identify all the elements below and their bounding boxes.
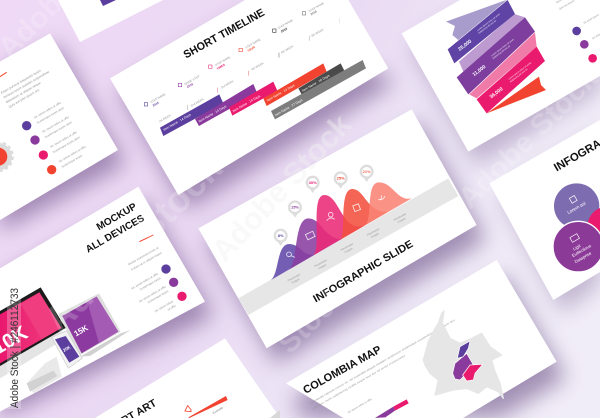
milestones: 5th WEEK — [280, 44, 294, 55]
text: Scelerisque turpis — [147, 289, 170, 304]
milestones: 4th WEEK — [250, 61, 264, 72]
hill icons — [287, 195, 385, 257]
timeline bars: Item Name · 10 Days — [301, 74, 331, 93]
device: laptop: 15K — [72, 323, 90, 338]
watermarks on background: Adobe Stock — [37, 147, 231, 341]
pins: 8% — [278, 233, 284, 238]
hill captions: Images — [397, 216, 407, 224]
milestones: 2016 — [186, 82, 194, 89]
timeline bars: Item Name · 14 Days — [232, 94, 261, 113]
milestones: 1st WEEK — [158, 113, 172, 124]
milestones: 2016 — [152, 101, 160, 108]
panel: colombia map — [286, 260, 557, 418]
milestones: 2016 — [310, 9, 318, 16]
chart elements: Example — [212, 405, 224, 415]
hill captions: Placeholder — [366, 227, 380, 237]
body text: Sit, ipsum tellus ut offlu — [347, 397, 373, 414]
ribbon chart: 11,000 — [472, 64, 487, 78]
milestones: STEP NAME — [308, 1, 325, 13]
circles: Lorem asi — [566, 201, 587, 215]
intro text: Bibendum at aliquet neque — [5, 81, 42, 104]
body text: Consectet capsule cursus sit, vel imperdiet aliquet sodales vestibulum scelerisque suspendisse elementum orci — [309, 318, 456, 405]
milestones — [144, 1, 339, 124]
ribbon chart: Adipiscing elit sed do — [509, 67, 529, 83]
ribbon chart: Adipiscing elit sed do — [492, 44, 512, 60]
pins: 15% — [291, 205, 299, 210]
timeline bars: Item Name · 14 Days — [162, 112, 192, 132]
list markers: Sit, ipsum tellus ut offlu — [58, 145, 87, 164]
heading: MOCKUP — [95, 201, 139, 233]
milestones: STEP NAME — [244, 37, 261, 50]
panel: chart art slide — [95, 338, 280, 418]
hill captions — [287, 212, 407, 285]
pins: 21% — [363, 169, 371, 174]
heading: ALL DEVICES — [84, 213, 147, 256]
panel: mockup all devices — [0, 187, 205, 412]
text: Sit, ipsum tellus ut offlu — [138, 285, 167, 304]
device: laptop — [58, 293, 131, 357]
milestones: STEP NAME — [214, 55, 231, 67]
list markers: Scelerisque turpis atem — [44, 120, 73, 139]
circles — [553, 183, 600, 272]
hill captions: Images — [370, 231, 380, 239]
milestones: STEP NAME — [277, 18, 294, 30]
hill captions: Images — [344, 246, 354, 254]
panel: gear list slide — [0, 33, 118, 220]
intro text: Aenean lorem sodales suspendisse — [2, 70, 50, 100]
body text: pretium, nunc adipiscing mollis turpis sed dui sit amet consectetur — [312, 353, 406, 410]
text — [127, 246, 177, 313]
text: Mobile instrument proin at — [127, 246, 159, 266]
ribbon chart: Lorem ipsum dolor sit amet — [508, 61, 532, 81]
timeline bars: Item Name · 14 Days — [198, 104, 227, 124]
slide details — [274, 165, 407, 285]
purple accent bar — [100, 0, 116, 6]
red dash — [0, 72, 7, 77]
circles: Dataprise — [574, 250, 593, 264]
milestones: NAME STEP — [183, 74, 200, 86]
panel: infographic slide — [198, 107, 477, 348]
ribbon chart: Adipiscing elit sed do — [478, 19, 498, 35]
text: Scelerisque turpis — [139, 276, 162, 291]
gear — [0, 142, 13, 171]
intro text: Etiam pulvinar bequeatis quam — [0, 68, 42, 95]
hill captions: Images — [317, 262, 328, 270]
list markers: Sit, ipsum tellus ut offlu — [49, 130, 78, 149]
list markers: Sit, ipsum tellus ut offlu — [41, 115, 70, 134]
milestones: TIMES — [216, 63, 226, 71]
list markers — [22, 101, 87, 174]
device: desktop monitor — [0, 287, 66, 393]
timeline bars: Item Name · 14 Days — [266, 83, 296, 103]
stock id label: Adobe Stock | #246112733 — [9, 288, 21, 408]
text: Sit, ipsum tellus ut offlu — [130, 272, 159, 291]
pins: 25% — [337, 176, 345, 181]
milestones: 6th WEEK — [310, 28, 324, 38]
hill captions: Placeholder — [313, 258, 328, 268]
pins: 30% — [309, 180, 317, 185]
hill captions: Images — [291, 277, 301, 285]
ribbon chart — [446, 0, 546, 113]
intro text: Quis aut pilot ipsum ero — [8, 88, 40, 109]
ribbon chart: Lorem ipsum dolor sit amet — [490, 38, 515, 57]
list markers: Scelerisque turpis atem — [52, 135, 81, 154]
intro text — [0, 68, 50, 109]
list markers: Scelerisque turpis — [60, 153, 83, 169]
chart elements — [185, 396, 280, 418]
hill captions: Placeholder — [287, 272, 301, 282]
hill captions: Placeholder — [340, 242, 354, 252]
hill captions: Placeholder — [393, 212, 407, 222]
milestones: 3rd WEEK — [220, 79, 234, 90]
bars — [375, 399, 409, 418]
panel: top-left partial slide — [58, 0, 163, 42]
list markers: Sit amet ipsum — [582, 12, 600, 25]
circles: Eutfectious — [571, 243, 592, 258]
panel: infographic circles — [489, 120, 600, 300]
watermark: Adobe Stock — [205, 107, 359, 268]
area hills — [271, 182, 412, 280]
timeline bars: Item Name · 27 Days — [274, 98, 304, 117]
grey band — [238, 178, 458, 315]
heading: COLOMBIA MAP — [301, 344, 383, 397]
ribbon chart: 36,000 — [489, 86, 505, 100]
map — [423, 311, 503, 398]
heading: INFOGRAPHIC SLIDE — [311, 238, 415, 305]
milestones: STEP NAME — [149, 92, 166, 104]
heading: SHORT TIMELINE — [182, 7, 267, 61]
pins — [274, 165, 374, 246]
ribbon chart: Lorem ipsum dolor sit amet — [476, 13, 501, 32]
text: ut offlu — [167, 304, 177, 312]
device: phone — [52, 331, 82, 368]
list markers — [161, 264, 187, 301]
red dash — [139, 235, 153, 242]
milestones: 2nd WEEK — [190, 97, 204, 108]
watermarks on background: Stock — [272, 279, 353, 360]
ribbon chart: 25,000 — [457, 38, 473, 53]
panel: ribbon card — [402, 0, 600, 152]
circles: Ligit — [572, 243, 582, 252]
body text — [309, 318, 456, 414]
milestones: TOUR — [246, 45, 256, 53]
text: Sit, ipsum tellus — [154, 299, 174, 313]
text: A diam sit in aliquet neque — [130, 251, 163, 272]
timeline bars — [160, 60, 366, 136]
panel: short timeline — [110, 0, 388, 195]
list markers: Scelerisque turpis atem — [36, 106, 65, 125]
milestones: 2016 — [280, 27, 288, 34]
device: phone: 20K — [62, 344, 72, 353]
list markers: Sit, ipsum tellus ut offlu — [33, 101, 62, 120]
list markers — [555, 0, 600, 63]
